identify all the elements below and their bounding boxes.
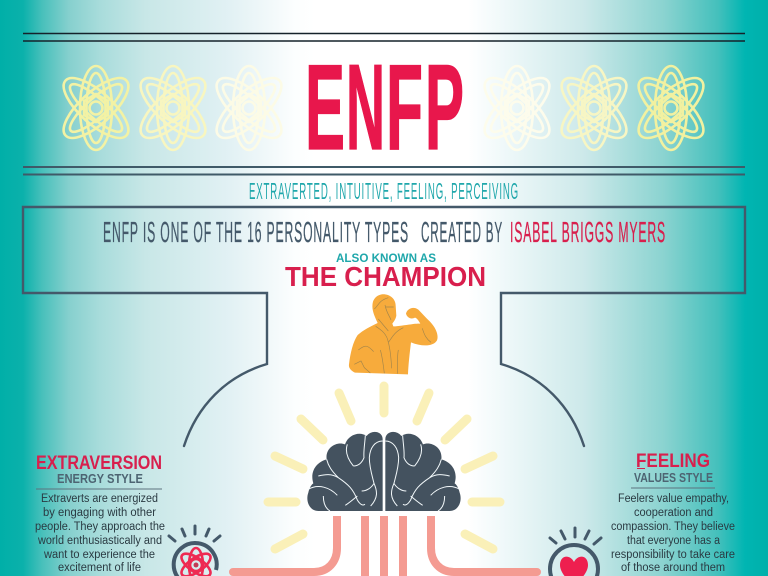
icon: flexing man	[349, 294, 438, 374]
title: E	[305, 39, 345, 175]
panel: extraversion	[35, 452, 165, 574]
infographic canvas: P	[425, 39, 464, 175]
title: N	[346, 39, 385, 175]
title: F	[386, 39, 423, 175]
also known as label: ALSO KNOWN AS	[336, 251, 436, 265]
panel: feeling: that everyone has a	[627, 535, 721, 547]
lower double rule	[23, 167, 745, 174]
center connector lines	[337, 516, 431, 576]
panel: extraversion: EXTRAVERSION	[36, 452, 162, 474]
panel: extraversion: excitement of life	[58, 562, 141, 574]
champion heading: THE CHAMPION	[285, 261, 486, 292]
panel: extraversion: world enthusiastically and	[37, 535, 162, 547]
icon: brain	[307, 432, 461, 511]
atom icons right	[476, 66, 712, 150]
panel: extraversion: people. They approach the	[35, 521, 165, 533]
atom icons left	[55, 66, 290, 150]
panel: feeling: compassion. They believe	[611, 521, 735, 533]
panel: extraversion: Extraverts are energized	[41, 493, 158, 505]
icon: heart bulb	[550, 528, 601, 576]
panel: feeling: Feelers value empathy,	[618, 493, 729, 505]
panel: feeling: of those around them	[621, 562, 725, 574]
panel: extraversion: ENERGY STYLE	[57, 472, 143, 486]
panel: feeling	[611, 450, 735, 574]
panel: extraversion: by engaging with other	[43, 507, 156, 519]
frame outline	[23, 207, 745, 446]
top double rule	[23, 34, 745, 41]
panel: feeling: FEELING	[636, 450, 710, 472]
connector lines	[233, 520, 537, 572]
panel: feeling: cooperation and	[634, 507, 713, 519]
icon: light rays	[268, 386, 500, 549]
panel: feeling: responsibility to take care	[611, 549, 735, 561]
intro line: CREATED BY	[421, 217, 503, 249]
panel: feeling: VALUES STYLE	[634, 471, 713, 485]
icon: energy bulb	[169, 526, 220, 576]
title	[305, 39, 464, 175]
panel: extraversion: want to experience the	[43, 549, 155, 561]
